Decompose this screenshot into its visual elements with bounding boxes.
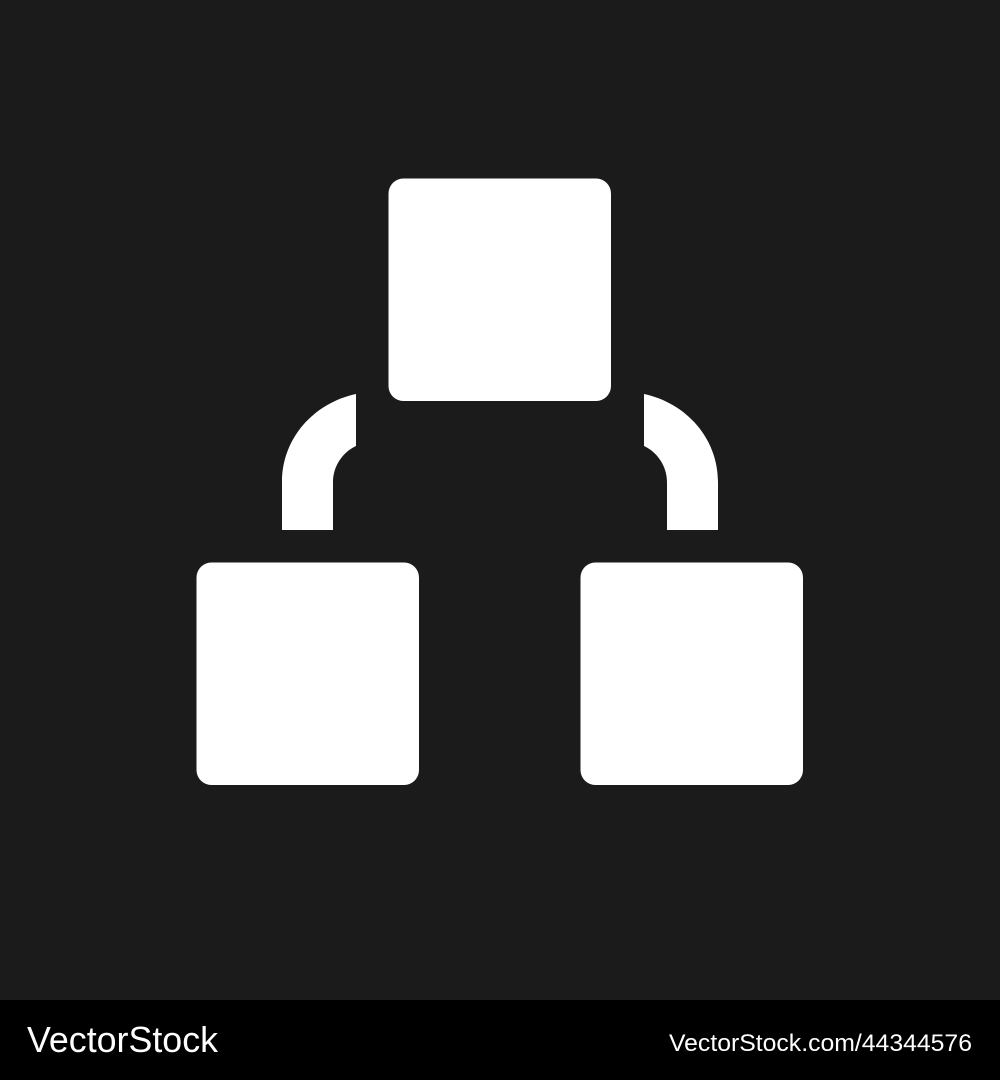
right connector <box>644 394 718 530</box>
footer logo text: VectorStock <box>27 1019 219 1060</box>
bottom left node <box>196 562 419 785</box>
top node <box>388 178 611 401</box>
left connector <box>282 394 356 530</box>
bottom right node <box>580 562 803 785</box>
footer bar <box>0 1000 1000 1080</box>
icon: hierarchy diagram <box>196 178 803 785</box>
footer image id text: VectorStock.com/44344576 <box>669 1030 972 1057</box>
